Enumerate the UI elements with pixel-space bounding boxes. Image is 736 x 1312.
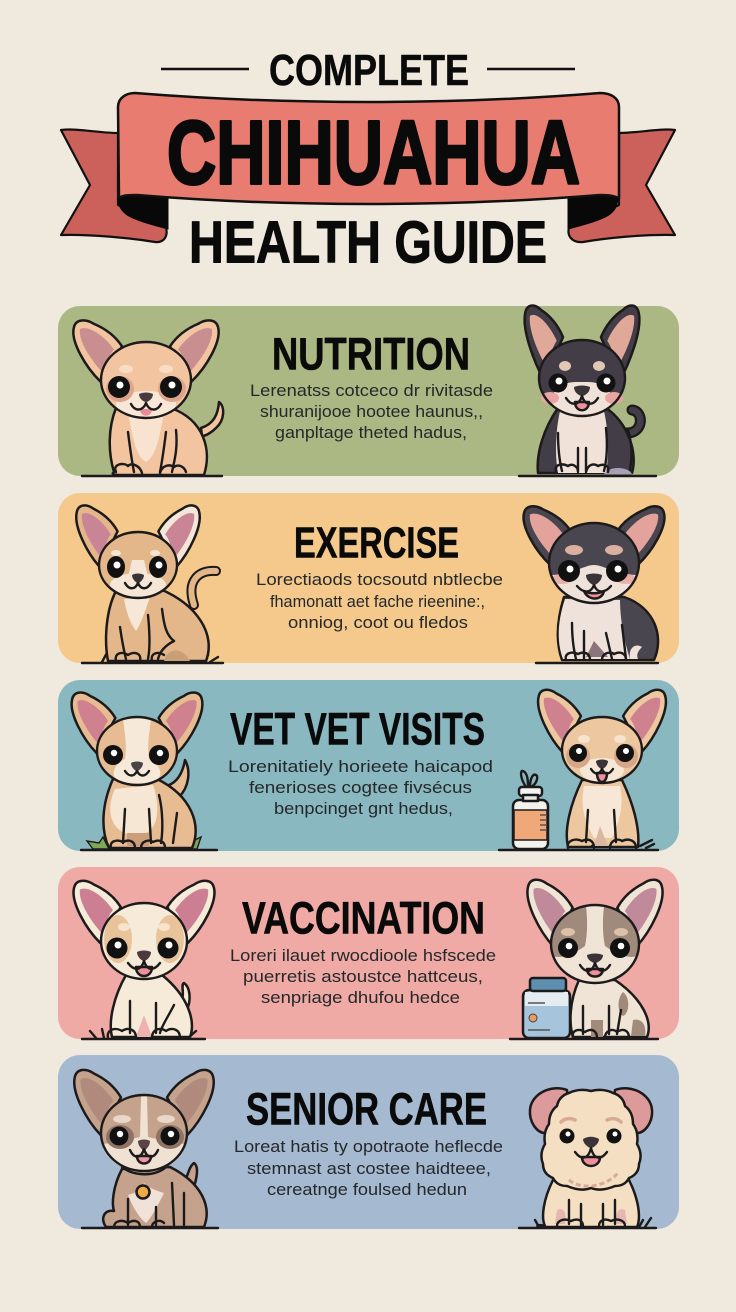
panel: vaccination	[58, 867, 679, 1039]
text: nutrition body: shuranijooe hootee haunus,,	[260, 402, 483, 421]
heading: vaccination: VACCINATION	[242, 892, 485, 944]
dog: white-faced tan puppy	[72, 693, 217, 850]
text: vet visits body: benpcinget gnt hedus,	[274, 799, 453, 818]
panel: senior care	[58, 1055, 679, 1229]
banner ribbon	[61, 93, 675, 242]
panel: exercise	[58, 493, 679, 663]
text: exercise body: fhamonatt aet fache rieenine:,	[270, 592, 485, 611]
heading: vet visits: VET VET VISITS	[230, 704, 485, 754]
heading: exercise: EXERCISE	[294, 518, 459, 568]
heading: nutrition: NUTRITION	[272, 328, 470, 380]
text: exercise body: Lorectiaods tocsoutd nbtlecbe	[256, 570, 503, 589]
dog: senior brown puppy	[74, 1070, 218, 1228]
text: vaccination body: puerretis astoustce hattceus,	[243, 967, 483, 986]
dog: taupe patched puppy	[510, 880, 663, 1039]
panel: vet visits	[58, 680, 679, 851]
text: exercise body: onniog, coot ou fledos	[288, 613, 468, 632]
text: vet visits body	[228, 757, 493, 818]
text: senior care body: stemnast ast costee haidteee,	[247, 1159, 491, 1178]
text: vaccination body: senpriage dhufou hedce	[261, 988, 460, 1007]
heading: health guide: HEALTH GUIDE	[189, 210, 547, 276]
panel: nutrition	[58, 306, 679, 476]
heading: chihuahua: CHIHUAHUA	[167, 104, 580, 204]
dog: tan puppy	[76, 505, 223, 663]
dog: peach puppy	[73, 320, 223, 476]
header	[61, 46, 675, 276]
text: vet visits body: fenerioses cogtee fivsécus	[249, 778, 472, 797]
text: exercise body	[256, 570, 503, 632]
dog: cream puppy	[74, 881, 214, 1039]
icon: medicine bottle	[513, 771, 548, 849]
dog: honey puppy	[499, 690, 666, 850]
icon: vaccine jar	[523, 978, 570, 1038]
text: vaccination body: Loreri ilauet rwocdioole hsfscede	[230, 946, 496, 965]
heading: senior care: SENIOR CARE	[246, 1084, 487, 1134]
text: nutrition body	[250, 381, 493, 442]
dog: dark grey puppy	[524, 506, 664, 663]
text: senior care body: Loreat hatis ty opotraote heflecde	[234, 1137, 503, 1156]
text: senior care body	[234, 1137, 503, 1199]
text: vet visits body: Lorenitatiely horieete haicapod	[228, 757, 493, 776]
text: vaccination body	[230, 946, 496, 1007]
text: nutrition body: ganpltage theted hadus,	[275, 423, 467, 442]
text: nutrition body: Lerenatss cotceco dr rivitasde	[250, 381, 493, 400]
dog: black and tan puppy	[519, 306, 656, 476]
dog: fluffy senior puppy	[519, 1088, 656, 1228]
heading: complete: COMPLETE	[269, 46, 469, 95]
text: senior care body: cereatnge foulsed hedun	[267, 1180, 467, 1199]
